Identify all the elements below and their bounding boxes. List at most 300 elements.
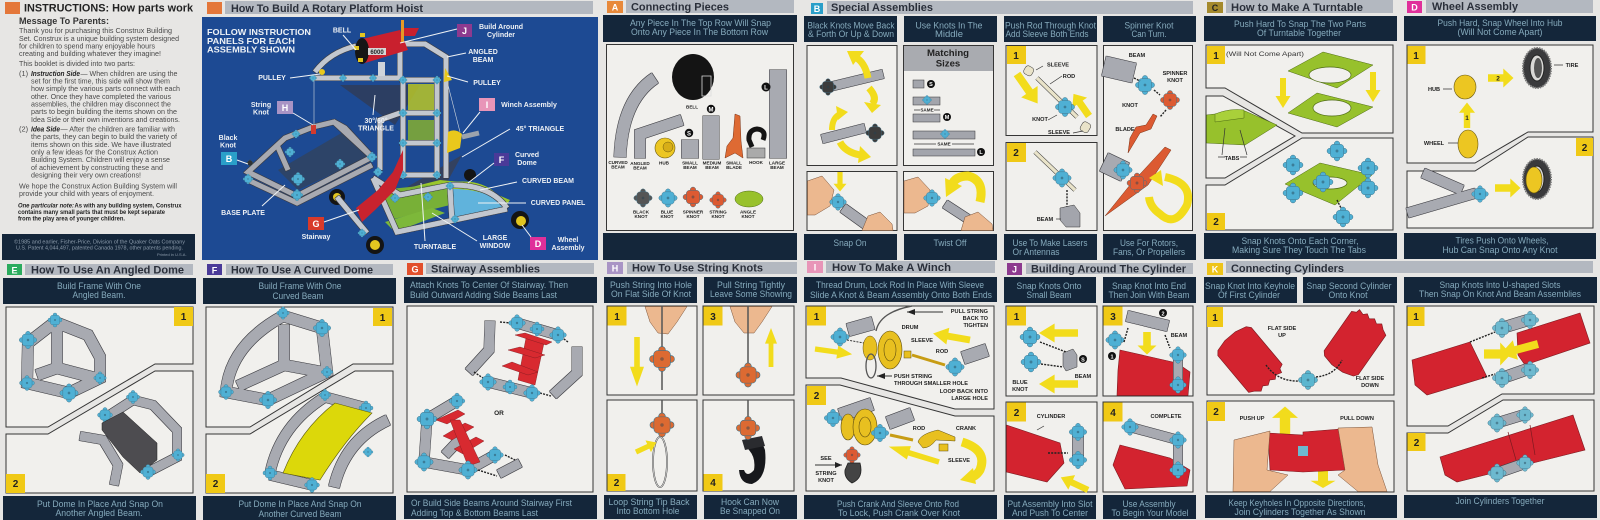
boxes [1407,45,1593,228]
tabs detail: TABS [1225,156,1240,162]
heading: stairway: Stairway Assemblies [431,264,540,276]
caption strips: Small Beam [1026,290,1072,300]
heading icon: D [1411,2,1418,12]
illustration: spinner knot and blade [1104,53,1188,219]
body text: Idea Side [31,124,60,134]
heading icon: F [212,266,218,276]
callout labels: TRIANGLE [358,126,394,132]
caption strips: Leave Some Showing [710,289,792,299]
caption strips: Twist Off [934,238,967,248]
step 1: BEAM [1075,374,1092,380]
caption strips [3,278,196,520]
heading icon: J [1012,264,1017,274]
heading: instructions: INSTRUCTIONS: How parts work [24,2,194,14]
caption strips: Add Sleeve Both Ends [1006,29,1089,39]
part labels: HOOK [749,160,764,165]
caption strips: Loop String Tip Back [608,497,690,507]
callout labels: LARGE [483,235,508,242]
part labels: BEAM [770,165,784,170]
boxes [6,307,193,493]
body text: how simply the various parts connect with each [31,84,180,93]
body text [19,26,180,198]
caption strips: Use For Rotors, [1120,238,1178,248]
body text: other. Once they have completed the various [31,92,171,101]
body text: set for the first time, this side will show them [31,76,170,86]
copyright footer: ©1985 and earlier, Fisher-Price, Division of the Quaker Oats Company [14,238,185,246]
part labels: BLUE [661,210,673,214]
step 1: ROD [936,349,948,355]
illustration: rod and sleeve step 1: ROD [1063,74,1075,80]
step 1: LOOP BACK INTO [940,389,989,395]
part labels: KNOT [711,214,725,219]
callout labels: Wheel [558,237,578,244]
step 1: DRUM [902,325,919,331]
body text: items shown on this side. We have illustrated [31,140,171,149]
callout labels: Cylinder [487,32,515,39]
boxes [1207,306,1594,492]
callout labels: Dome [517,160,537,167]
caption strips: Or Build Side Beams Around Stairway First [411,498,573,508]
caption strips: Another Angled Beam. [56,508,142,518]
step 1: KNOT [1012,387,1029,393]
callout labels: PULLEY [258,75,286,82]
step 1: 1 [1465,115,1469,122]
heading: special assemblies: Special Assemblies [831,2,933,14]
illustration: spinner knot and blade: BLADE [1115,127,1135,133]
step 2: SEE [820,456,832,462]
keyhole step 1: 1 [1212,313,1218,324]
step 2 [1006,402,1091,497]
step 1: SLEEVE [911,338,933,344]
step 1: 2 [1496,76,1500,82]
body text: the parts, they can begin to build the variety of [31,132,178,141]
caption strips: Join Cylinders Together [1456,496,1545,506]
step 3: 1 [1110,354,1114,360]
matching sizes chart: SAME [937,142,951,146]
panel: A connecting pieces [603,0,797,260]
step 2: 2 [1213,217,1219,228]
callout labels: BELL [333,28,352,34]
step 1: S [1081,358,1085,364]
heading: angled dome: How To Use An Angled Dome [31,264,184,276]
step 2 dome: 2 [213,479,219,490]
body text: Set. Construx is a unique building system designed [19,34,179,43]
panel: K connecting cylinders [1204,261,1597,518]
part labels: ANGLE [740,210,756,214]
parts box [606,44,794,230]
safety note: contains many small parts that must be kept separate [18,209,165,216]
step 1: PULL STRING [951,309,988,315]
heading bar [1026,263,1193,274]
caption strips: Of Turntable Together [1257,28,1341,38]
callout labels: Curved [515,152,539,159]
heading: curved dome: How To Use A Curved Dome [231,264,373,276]
step 3: 3 [710,312,716,323]
step 2 [1207,141,1378,230]
caption strips: Slide A Knot & Beam Assembly Onto Both Ends [810,290,993,300]
callout labels: Winch Assembly [501,102,557,109]
boxes [806,306,994,491]
heading bar [1226,0,1393,13]
step 2 [608,400,674,491]
step 2: 2 [814,391,820,402]
step 1: PUSH STRING [894,374,932,380]
step 2: CYLINDER [1037,414,1065,420]
part: large beam [770,70,786,158]
panel: E angled dome [3,264,196,520]
part labels: BLADE [726,165,742,170]
callout labels [219,24,586,252]
body text: — After the children are familiar with [60,124,175,134]
callout labels: I [486,100,488,110]
step 1: 1 [614,312,620,323]
heading bar [1226,261,1593,273]
boxes [206,307,393,493]
step 1 [1007,306,1092,394]
caption strips: (Will Not Come Apart) [1458,27,1543,37]
matching sizes chart: S [929,82,933,88]
poster caption: FOLLOW INSTRUCTION [207,27,311,37]
step 3 [704,306,777,387]
tabs detail [1206,110,1277,162]
step 2: CRANK [956,426,976,432]
body text: This booklet is divided into two parts: [19,59,135,68]
heading: hoist: How To Build A Rotary Platform Hoist [231,3,423,15]
caption strips: Snap Second Cylinder [1306,281,1392,291]
body text: assemblies, the children may disconnect the [31,100,171,108]
part labels: CURVED [608,160,628,165]
matching sizes chart [904,46,993,156]
caption strips: Making Sure They Touch The Tabs [1232,245,1367,255]
caption strips: Hub Can Snap Onto Any Knot [1442,245,1558,255]
callout labels: 30°/60° [364,117,388,125]
matching sizes chart: M [945,115,950,121]
heading icon: K [1212,264,1219,274]
body text: only a few ideas for the Construx Action [31,148,158,156]
heading icon: C [1212,3,1219,13]
matching sizes chart: Matching [927,48,969,59]
caption strips: Put Dome In Place And Snap On [37,499,163,509]
keyhole step 1: UP [1278,333,1286,339]
illustration: spinner knot and blade: KNOT [1167,78,1184,84]
part: bell [672,54,714,100]
part: small beam [682,140,698,158]
step 1: (Will Not Come Apart) [1226,51,1304,58]
matching sizes chart: Sizes [936,58,960,70]
caption strips: On Flat Side Of Knot [611,289,692,299]
poster caption: ASSEMBLY SHOWN [207,44,295,54]
body text: Thank you for purchasing this Construx Building [19,26,172,35]
part labels: SMALL [682,160,698,166]
caption strips: Push Rod Through Knot [1005,20,1097,30]
u-slot step 2 [1408,407,1585,482]
step 3 [1104,306,1190,396]
u-slot step 1: 1 [1413,312,1419,323]
caption strips: Build Frame With One [258,281,342,291]
part: hub [655,138,675,158]
callout labels: TURNTABLE [414,244,456,251]
heading: string knots: How To Use String Knots [632,262,763,274]
step 1: TIRE [1566,63,1579,69]
step 1: BLUE [1012,380,1028,386]
heading bar [626,0,794,13]
step 2: 2 [1014,408,1020,419]
caption strips: Pull String Tightly [717,280,786,290]
model: bell and flag: 6000 [370,50,384,56]
callout labels: ANGLED [468,49,498,56]
lower stairway assembly [415,393,520,479]
callout labels: CURVED PANEL [531,200,586,207]
body text: Building System. Children will enjoy a sense [31,155,170,164]
callout labels: PULLEY [473,80,501,87]
size markers [685,82,770,138]
body text: designing their very own creations! [31,170,141,180]
heading icon: I [814,262,816,272]
step 1: 1 [1213,51,1219,62]
step 1 [608,306,687,390]
keyhole step 1 [1207,306,1390,398]
caption strips: Tires Push Onto Wheels, [1456,236,1548,246]
caption strips [1004,277,1196,519]
heading: cylinder: Building Around The Cylinder [1031,264,1187,276]
illustration: rod and sleeve step 2 [1007,143,1080,227]
part labels: BEAM [611,164,625,170]
illustration: rod and sleeve step 1: SLEEVE [1047,62,1069,68]
keyhole step 1: FLAT SIDE [1356,376,1385,382]
caption strips: Hook Can Now [721,497,780,507]
knots row [634,187,763,208]
panel: instructions text [2,2,195,260]
heading icon [1207,263,1223,275]
model: tower and upper beams [309,44,479,195]
caption strips: Use To Make Lasers [1012,238,1088,248]
caption strips: Snap Knots Onto [1016,281,1082,291]
caption strips: & Forth Or Up & Down [808,29,894,39]
part: angled beam [640,120,682,158]
caption strips: Put Dome In Place And Snap On [238,499,362,509]
part labels [608,104,785,219]
callout labels: Knot [253,110,270,116]
caption strips: Then Join With Beam [1108,290,1190,300]
empty bottom strip [603,233,797,260]
heading bar [25,264,193,275]
body text: for children to spend many enjoyable hours [19,42,155,50]
step 4: 4 [710,478,716,489]
illustration: black knots pivoting [820,51,884,163]
caption strips: Build Frame With One [57,281,141,291]
step 1: BACK TO [963,316,989,322]
callout labels: WINDOW [480,243,511,250]
part: small blade [725,114,743,158]
step 1: WHEEL [1424,141,1445,147]
callout labels: Knot [220,142,237,150]
caption strips: Can Turn. [1132,29,1166,39]
caption strips: Push String Into Hole [610,280,692,290]
heading icon: E [11,266,18,276]
upper stairway assembly [469,315,577,401]
u-slot step 1 [1408,307,1590,395]
caption strips: Angled Beam. [72,290,126,300]
part: medium beam [703,116,719,159]
heading icon [811,3,823,14]
step 2 [1408,138,1593,213]
instruction strip [603,15,797,42]
heading bar [226,264,393,275]
illustration: spinner knot and blade: BEAM [1129,53,1146,59]
model: stairway, turntable and dome [337,150,510,237]
heading icon [407,263,423,275]
body text: parts to begin building the items shown on the [31,107,177,116]
step 2 dome [6,390,184,493]
poster caption: PANELS FOR EACH [207,36,295,46]
step 4: 4 [1110,408,1116,419]
panel: D wheel assembly [1404,0,1596,259]
caption strips: Put Assembly Into Slot [1008,499,1093,509]
blue poster background [202,17,598,260]
callout labels: Stairway [302,234,331,241]
heading icon [1407,1,1422,13]
u-slot step 2: 2 [1414,438,1420,449]
caption strips [404,277,597,519]
model: base frame [243,122,377,203]
poster caption [207,27,311,54]
caption strips: Adding Top & Bottom Beams Last [411,508,539,518]
panel: H string knots [604,262,797,519]
caption strips: Join Cylinders Together As Shown [1234,507,1366,517]
caption strips: Spinner Knot [1124,20,1174,30]
keyhole step 2: 2 [1213,407,1219,418]
body text: Instruction Side [31,69,80,78]
safety note: from the play area of younger children. [18,216,125,222]
step 1: 1 [1014,312,1020,323]
caption strips: Push Crank And Sleeve Onto Rod [837,499,959,509]
heading bar [1426,0,1593,13]
caption strips [1204,16,1397,259]
part: curved beam [620,78,655,157]
caption strips [804,16,1196,260]
step 4 [1104,402,1190,489]
part labels: BELL [686,104,698,110]
copyright footer: U.S. Patent 4,044,497, patented Canada 1978, other patents pending. [16,246,183,252]
model: bell and flag [354,20,419,76]
keyhole step 2: PULL DOWN [1340,416,1374,422]
body text: (1) [19,69,28,78]
instruction strip: Any Piece In The Top Row Will Snap [630,18,771,28]
step 1: TIGHTEN [963,323,988,329]
heading icon [1007,263,1022,275]
heading: winch: How To Make A Winch [832,262,951,274]
illustration: rod and sleeve step 1: SLEEVE [1048,130,1070,136]
caption strips: Push Hard, Snap Wheel Into Hub [1438,18,1563,28]
caption strips: Be Snapped On [720,506,780,516]
heading: connecting cylinders: Connecting Cylinders [1231,263,1344,275]
part labels: MEDIUM [703,160,721,166]
illustration: twist off [904,176,993,230]
heading icon [5,2,20,14]
caption strips: Snap Knots Onto Each Corner, [1242,236,1358,246]
heading: turntable: How to Make A Turntable [1231,2,1363,14]
heading icon [7,264,22,276]
part labels: SMALL [726,160,742,166]
part: hook [747,129,765,158]
heading icon: G [411,264,419,274]
step 1 [1207,46,1380,127]
callout labels: H [282,103,288,113]
callout labels: D [535,239,542,249]
keyhole step 1: FLAT SIDE [1268,326,1297,332]
heading bar [225,1,593,14]
heading icon [607,262,623,274]
part labels: KNOT [634,214,648,219]
callout labels: BASE PLATE [221,210,265,217]
callout labels: J [462,26,467,36]
heading bar [826,261,995,273]
heading bar [426,263,594,274]
body text: provide your child with years of enjoyment. [19,189,154,198]
boxes [607,306,794,491]
heading icon [1207,2,1223,13]
callout labels: B [226,154,233,164]
step 2 dome: 2 [13,479,19,490]
caption strips: Middle [935,29,963,39]
heading icon [807,261,823,273]
step 1: 1 [1413,51,1419,62]
panel: B special assemblies [804,1,1196,260]
caption strips: Snap On [834,238,867,248]
illustration: rod and sleeve step 1 [1007,46,1096,136]
body text: (2) [19,124,28,134]
box [407,306,593,492]
heading icon [207,2,222,14]
part labels: BLACK [633,210,650,214]
caption strips: Use Knots In The [916,20,983,30]
caption strips [804,277,997,519]
callout labels: Build Around [479,24,523,31]
step 2: SLEEVE [948,458,970,464]
part labels: KNOT [686,214,700,219]
instruction strip: Onto Any Piece In The Bottom Row [631,27,769,37]
callout labels: CURVED BEAM [522,178,574,185]
panel: C turntable [1204,0,1397,259]
panel: J cylinder [1004,263,1196,519]
step 1 frame [219,307,392,409]
boxes [1206,45,1393,230]
caption strips [604,277,797,519]
heading: connecting pieces: Connecting Pieces [631,2,729,14]
caption strips: Snap Knot Into Keyhole [1205,281,1295,291]
step 2: 2 [614,478,620,489]
caption strips: Curved Beam [272,291,324,301]
keyhole step 2 [1207,402,1387,492]
callout labels: BEAM [473,57,493,64]
body text: of achievement by constructing these and [31,163,163,172]
step 2: 2 [1582,143,1588,154]
caption strips: Fans, Or Propellers [1113,247,1186,257]
part labels: LARGE [769,160,785,166]
caption strips: Snap Knot Into End [1112,281,1186,291]
caption strips: Another Curved Beam [258,509,342,519]
illustration: spinner knot and blade: SPINNER [1163,71,1187,77]
matching sizes chart: SAME [920,108,934,112]
step 2: KNOT [818,478,835,484]
callout labels: Assembly [551,245,585,252]
size markers: L [764,86,768,92]
step 1 frame [19,307,193,402]
size markers: S [687,132,691,138]
part labels: BEAM [705,165,719,170]
caption strips: Thread Drum, Lock Rod In Place With Sleeve [816,280,984,290]
heading bar [827,1,1193,14]
